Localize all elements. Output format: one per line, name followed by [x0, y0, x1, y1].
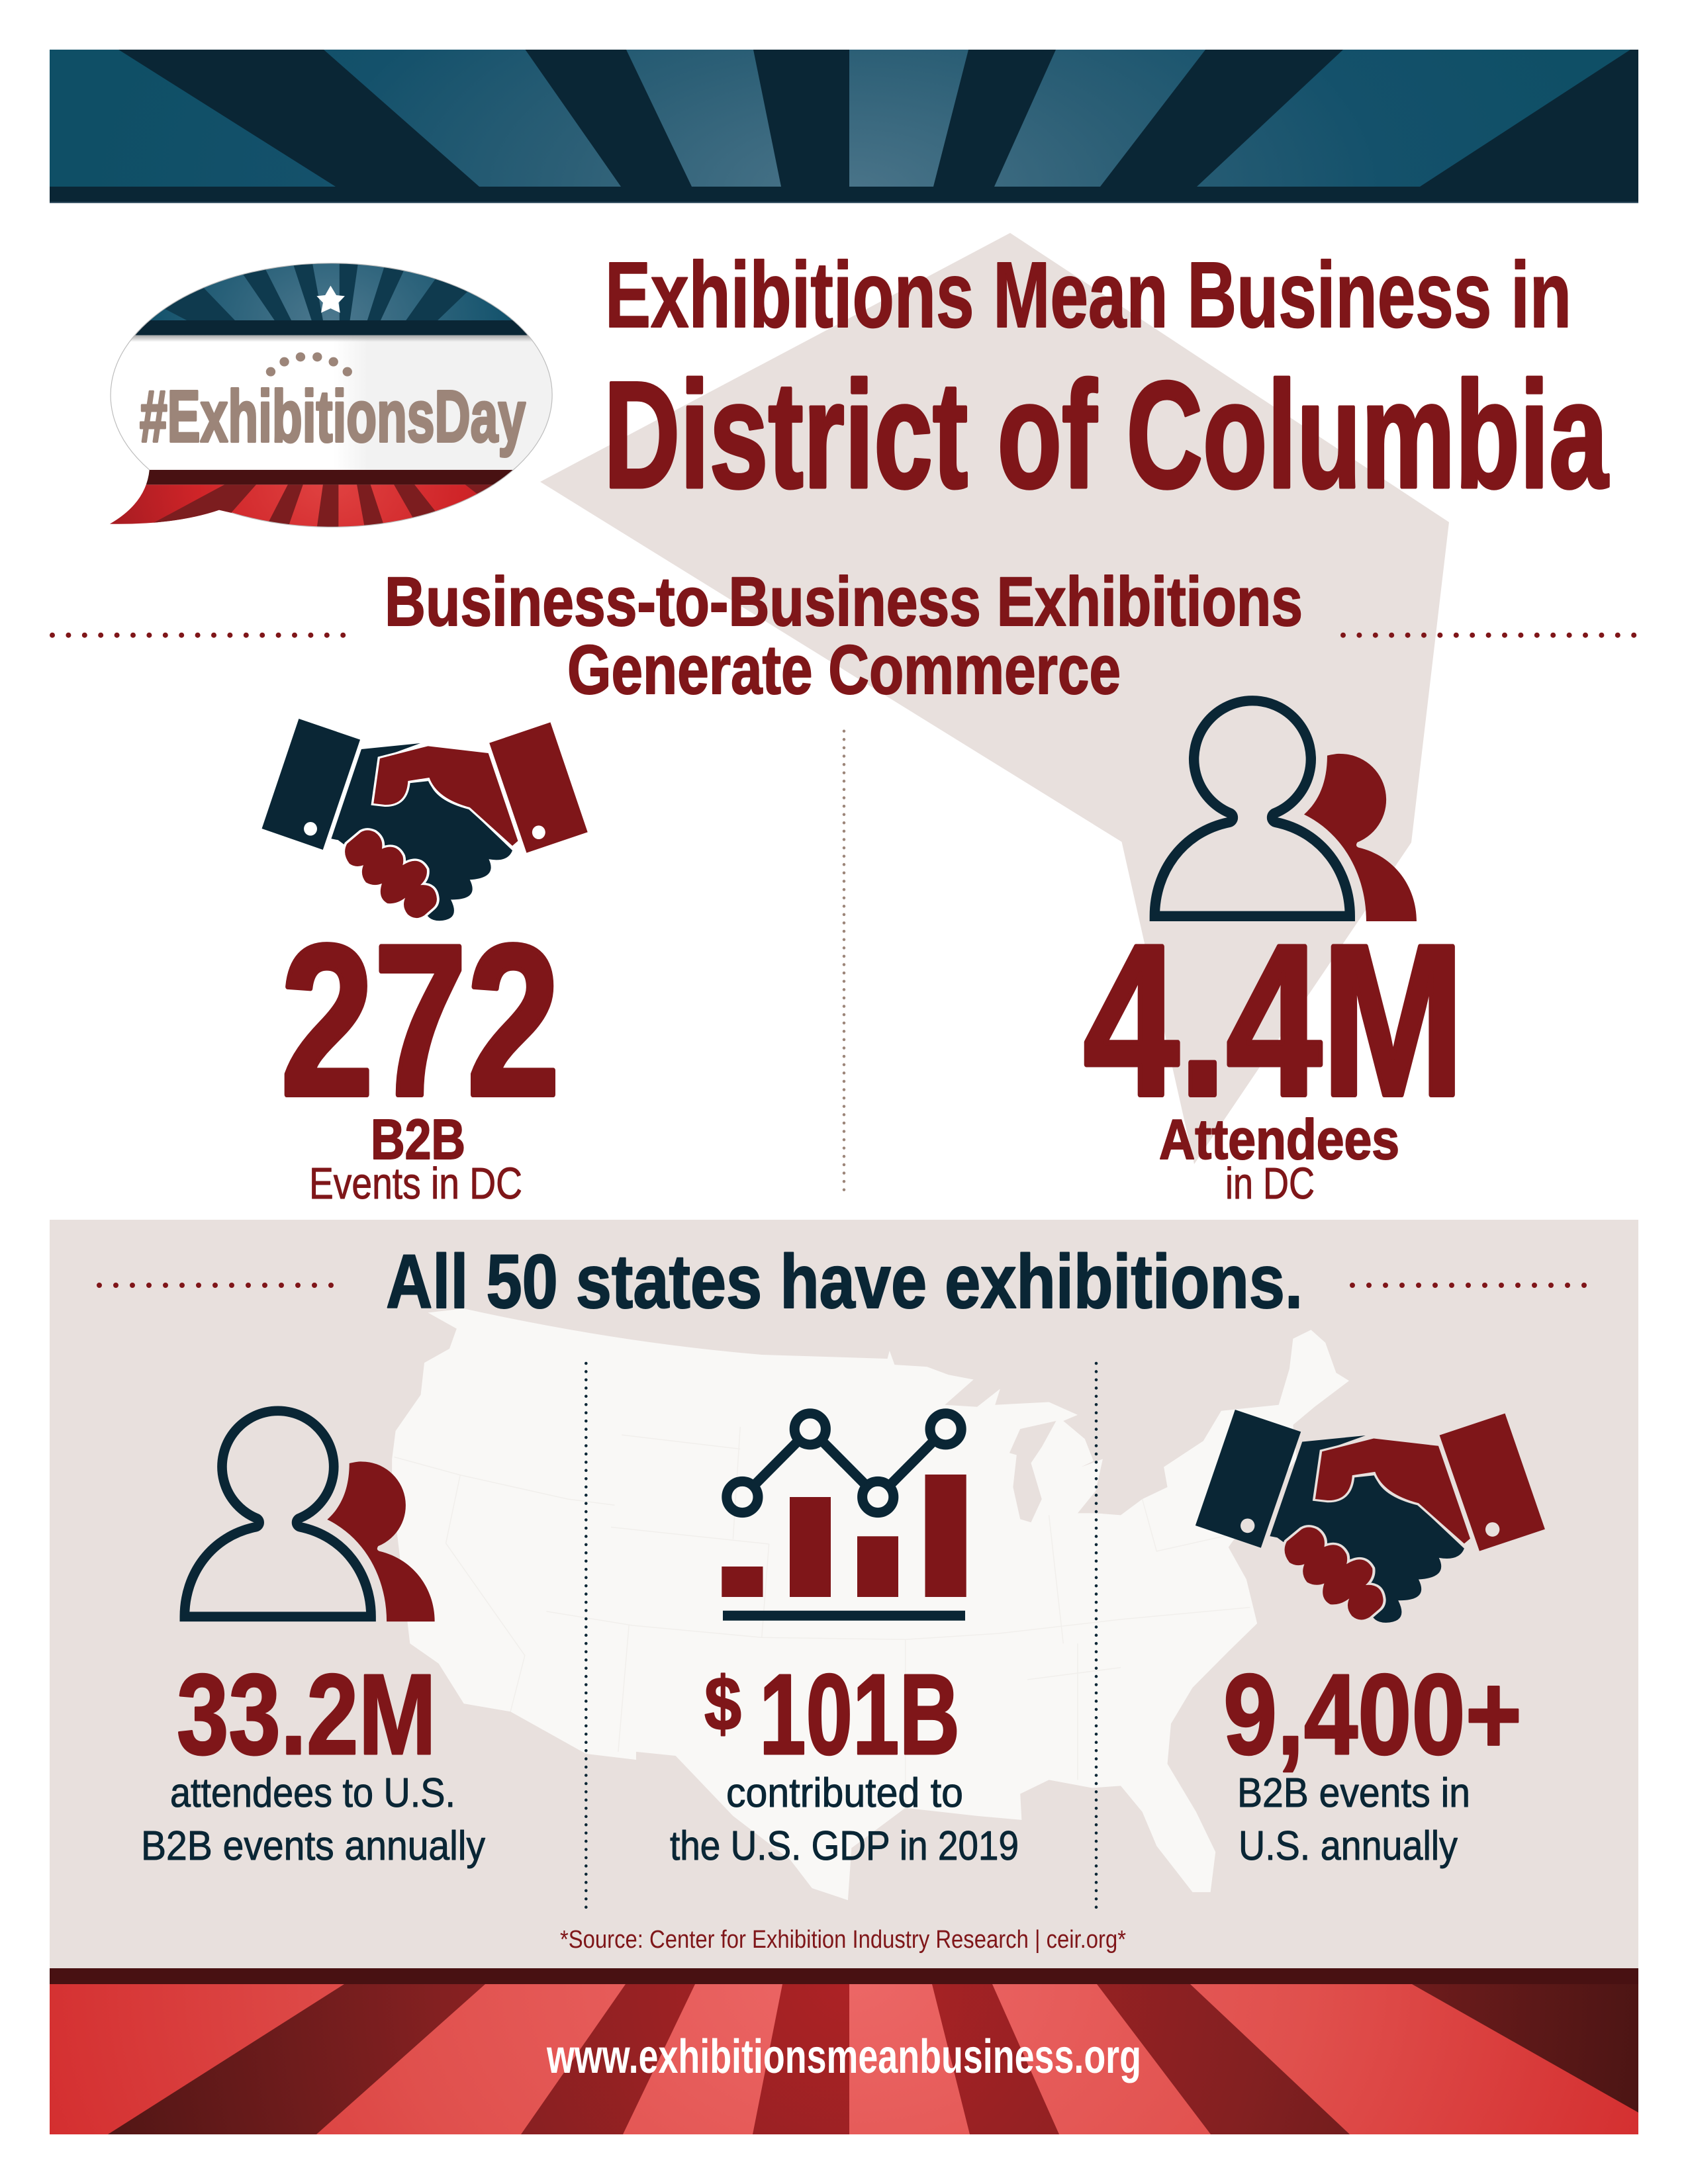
stat block: $101B GDP: [670, 1650, 1019, 1869]
bottom banner: [50, 1968, 1638, 2134]
stat: 272: 272: [281, 900, 560, 1140]
label: Events in DC: Events in DC: [309, 1159, 522, 1208]
label: B2B: B2B: [371, 1109, 465, 1171]
section heading: all 50 states: All 50 states have exhibitions.: [386, 1240, 1303, 1324]
icon: star: [316, 286, 345, 313]
stat block: $101B GDP: the U.S. GDP in 2019: [670, 1823, 1019, 1869]
map: continental United States: [392, 1308, 1349, 1900]
icon: people: [1154, 701, 1417, 921]
stat block: $101B GDP: $: [704, 1662, 741, 1747]
stat: 4.4M: 4.4M: [1084, 900, 1464, 1140]
stat block: 33.2M attendees: B2B events annually: [141, 1823, 485, 1869]
stat block: 33.2M attendees: [141, 1650, 485, 1869]
top banner: [50, 50, 1638, 203]
section heading: commerce: Business-to-Business Exhibitions: [385, 563, 1303, 641]
source note: *Source: Center for Exhibition Industry Research | ceir.org*: [560, 1926, 1126, 1954]
stat block: 9,400+ events: 9,400+: [1223, 1650, 1522, 1778]
stat block: 9,400+ events: U.S. annually: [1239, 1823, 1458, 1869]
label: Attendees: Attendees: [1159, 1109, 1399, 1171]
stat block: 33.2M attendees: 33.2M: [177, 1650, 436, 1778]
stat block: $101B GDP: 101B: [759, 1650, 960, 1778]
stat block: $101B GDP: contributed to: [726, 1770, 963, 1816]
section heading: commerce: [385, 563, 1303, 709]
logo hashtag text: #ExhibitionsDay: [140, 376, 526, 457]
state silhouette background: [540, 233, 1449, 1164]
icon: arc of dots: [266, 352, 352, 377]
website url: www.exhibitionsmeanbusiness.org: [546, 2030, 1141, 2083]
logo: #ExhibitionsDay speech bubble: [86, 260, 561, 529]
icon: handshake (events): [1196, 1410, 1545, 1623]
icon: handshake: [262, 719, 588, 921]
bubble outline: [111, 263, 552, 527]
label: in DC: in DC: [1225, 1159, 1315, 1208]
stat block: 9,400+ events: B2B events in: [1237, 1770, 1470, 1816]
stat block: 9,400+ events: [1223, 1650, 1522, 1869]
chart icon: bars and trend line: [722, 1414, 966, 1621]
panel: national stats: [50, 1220, 1638, 1968]
section heading: commerce: Generate Commerce: [567, 631, 1121, 709]
icon: people (attendees): [185, 1411, 435, 1621]
stat block: 33.2M attendees: attendees to U.S.: [170, 1770, 455, 1816]
